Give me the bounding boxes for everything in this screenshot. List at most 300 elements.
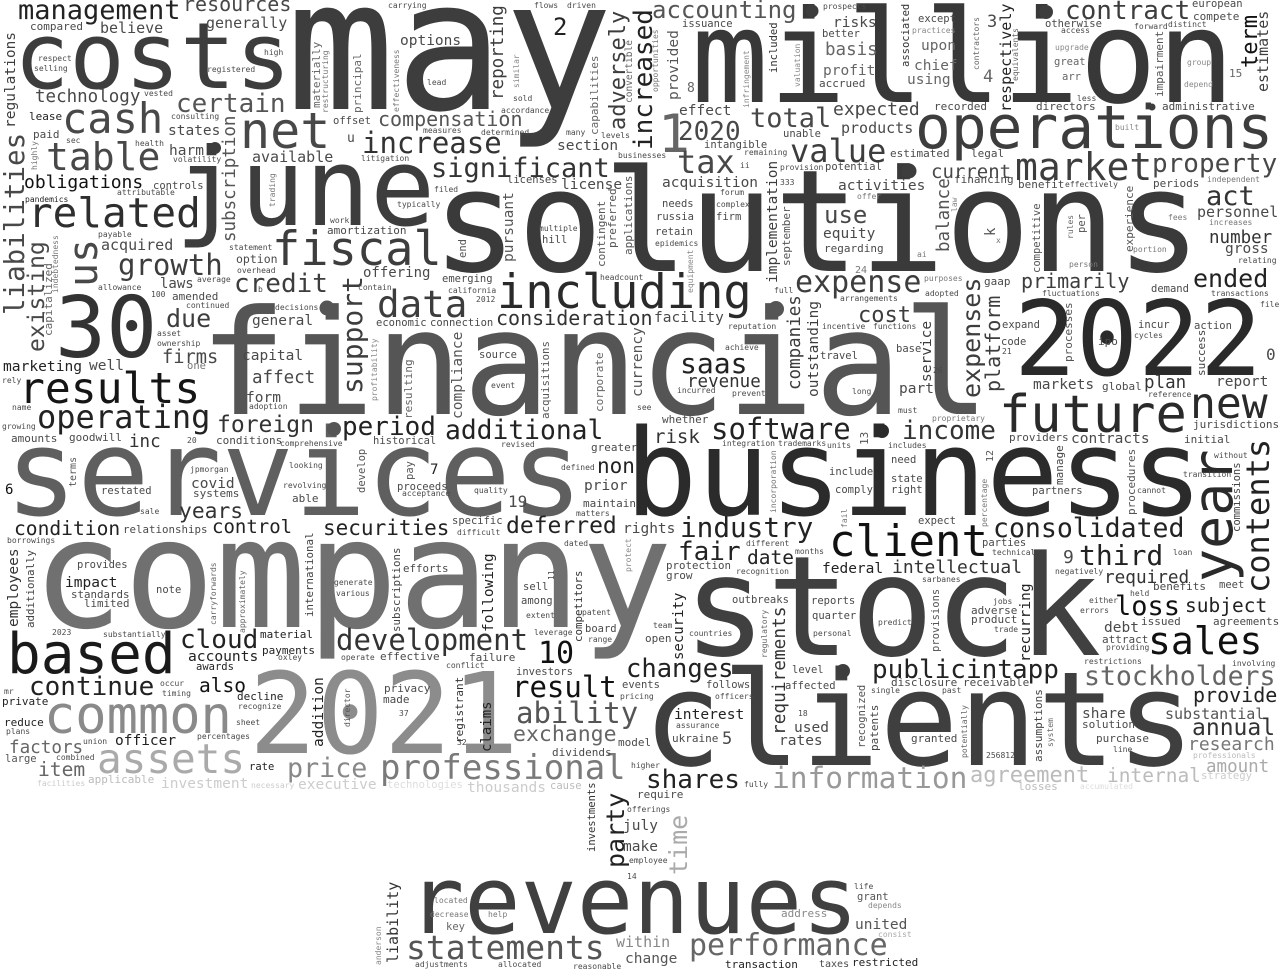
medium words: performance	[689, 928, 888, 963]
horizontal small words: must	[898, 406, 917, 415]
medium words: app	[1012, 655, 1059, 685]
word: 30: 30	[55, 279, 157, 378]
horizontal small words: 32	[457, 738, 467, 747]
horizontal small words: mr	[4, 687, 14, 696]
horizontal small words: officers	[715, 692, 754, 701]
horizontal small words: consist	[878, 930, 912, 939]
vertical small words: capabilities	[588, 56, 601, 135]
horizontal small words: allowance	[98, 283, 142, 292]
vertical words: employees	[6, 548, 22, 627]
horizontal small words: combined	[56, 753, 95, 762]
medium words: firms	[162, 347, 218, 368]
medium words: price	[287, 753, 367, 784]
vertical words: companies	[785, 295, 805, 390]
medium words: required	[1104, 568, 1189, 588]
medium words: item	[38, 758, 85, 781]
horizontal small words: able	[292, 492, 318, 505]
horizontal small words: difficult	[457, 528, 501, 537]
medium words: compensation	[378, 107, 522, 131]
horizontal small words: issuance	[682, 18, 733, 30]
vertical small words: competitive	[1031, 203, 1043, 273]
medium words: current	[931, 161, 1011, 183]
horizontal small words: countries	[689, 629, 733, 638]
horizontal small words: file	[1260, 300, 1279, 309]
horizontal small words: licenses	[507, 174, 558, 186]
horizontal small words: past	[942, 686, 961, 695]
horizontal small words: regarding	[824, 242, 884, 255]
horizontal small words: determined	[481, 128, 529, 137]
horizontal small words: meet	[1219, 579, 1244, 591]
horizontal small words: specific	[452, 515, 503, 527]
horizontal small words: work	[330, 216, 349, 225]
horizontal small words: require	[637, 788, 683, 801]
vertical small words: competitors	[572, 570, 585, 642]
medium words: total	[750, 103, 831, 134]
horizontal small words: percentages	[197, 732, 250, 741]
medium words: loss	[1115, 591, 1180, 622]
horizontal small words: sheet	[236, 718, 260, 727]
vertical small words: processes	[1062, 302, 1075, 362]
horizontal small words: whether	[662, 413, 709, 426]
horizontal small words: goodwill	[69, 431, 122, 444]
vertical words: regulations	[3, 32, 19, 128]
horizontal small words: generate	[334, 578, 373, 587]
horizontal small words: sold	[513, 94, 532, 103]
medium words: data	[377, 282, 467, 326]
vertical words: following	[481, 553, 497, 632]
horizontal small words: ukraine	[672, 732, 718, 745]
horizontal small words: impact	[65, 575, 117, 591]
horizontal small words: 20	[187, 436, 197, 445]
horizontal small words: material	[260, 628, 313, 641]
medium words: growth	[118, 248, 223, 282]
medium words: public	[872, 655, 966, 685]
horizontal small words: board	[585, 623, 617, 635]
horizontal small words: maintain	[583, 497, 636, 510]
horizontal small words: achieve	[725, 343, 759, 352]
vertical small words: percentage	[980, 479, 989, 527]
medium words: 10	[538, 636, 574, 671]
horizontal small words: emerging	[442, 273, 493, 285]
medium words: agreement	[970, 763, 1089, 788]
horizontal small words: prospects	[823, 2, 867, 11]
word: stock: stock	[683, 526, 1101, 688]
vertical words: contents	[1239, 439, 1277, 593]
horizontal small words: 2012	[476, 295, 495, 304]
vertical words: existing	[24, 241, 50, 352]
medium words: certain	[176, 89, 286, 119]
medium words: value	[790, 132, 886, 170]
horizontal small words: among	[521, 595, 553, 607]
horizontal small words: periods	[1153, 177, 1199, 190]
horizontal small words: private	[2, 695, 48, 708]
vertical words: subscription	[220, 116, 240, 242]
horizontal small words: executive	[298, 777, 377, 793]
vertical small words: approximately	[238, 570, 247, 633]
horizontal small words: form	[246, 390, 281, 406]
horizontal small words: address	[781, 907, 827, 920]
horizontal small words: controls	[153, 180, 204, 192]
horizontal small words: increases	[1209, 218, 1253, 227]
horizontal small words: using	[907, 72, 951, 88]
horizontal small words: matters	[576, 509, 610, 518]
vertical small words: investments	[586, 782, 598, 852]
vertical words: compliance	[450, 332, 466, 419]
horizontal small words: affected	[785, 680, 836, 692]
vertical words: respectively	[997, 4, 1015, 112]
medium words: ability	[516, 696, 638, 730]
horizontal small words: different	[746, 539, 790, 548]
horizontal small words: technical	[992, 548, 1036, 557]
horizontal small words: grow	[666, 569, 693, 582]
horizontal small words: reduce	[4, 716, 44, 729]
vertical small words: carryforwards	[209, 562, 218, 625]
horizontal small words: high	[264, 48, 283, 57]
horizontal small words: headcount	[600, 273, 644, 282]
horizontal small words: offset	[333, 115, 371, 127]
horizontal small words: source	[479, 349, 517, 361]
vertical small words: additionally	[24, 549, 37, 628]
vertical words: implementation	[765, 161, 781, 283]
word: 2021: 2021	[249, 650, 519, 780]
medium words: market	[1015, 145, 1152, 189]
horizontal small words: decisions	[275, 303, 319, 312]
vertical small words: experience	[1123, 186, 1136, 252]
horizontal small words: portion	[1133, 245, 1167, 254]
horizontal small words: built	[1115, 123, 1139, 132]
vertical small words: associated	[900, 4, 912, 67]
horizontal small words: various	[336, 589, 370, 598]
horizontal small words: ownership	[157, 339, 201, 348]
horizontal small words: chief	[914, 58, 958, 74]
horizontal small words: without	[1214, 451, 1248, 460]
vertical small words: corporate	[593, 352, 606, 412]
vertical words: security	[671, 593, 687, 660]
horizontal small words: full	[774, 286, 793, 295]
medium words: fiscal	[272, 222, 442, 277]
vertical words: recurring	[1018, 583, 1034, 662]
medium words: related	[28, 189, 201, 237]
horizontal small words: travel	[820, 350, 858, 362]
horizontal small words: transaction	[725, 958, 798, 971]
vertical words: service	[919, 321, 935, 382]
vertical small words: materially	[310, 41, 323, 108]
horizontal small words: share	[1082, 706, 1126, 722]
horizontal small words: long	[852, 387, 871, 396]
horizontal small words: include	[829, 466, 873, 478]
vertical small words: success	[1195, 330, 1208, 376]
horizontal small words: protection	[666, 559, 731, 572]
horizontal small words: person	[1069, 260, 1098, 269]
medium words: assets	[97, 735, 245, 783]
horizontal small words: fully	[744, 780, 768, 789]
medium words: non	[597, 454, 635, 478]
horizontal small words: rely	[2, 376, 21, 385]
medium words: sales	[1148, 619, 1262, 663]
horizontal small words: sale	[140, 507, 159, 516]
horizontal small words: legal	[971, 147, 1004, 160]
horizontal small words: proprietary	[932, 414, 985, 423]
vertical small words: trading	[268, 173, 277, 207]
word: solutions: solutions	[432, 140, 1201, 305]
medium words: period	[342, 412, 436, 442]
vertical small words: patents	[868, 705, 881, 751]
medium words: increase	[362, 126, 502, 160]
horizontal small words: decline	[237, 690, 283, 703]
word: financial: financial	[199, 279, 990, 449]
horizontal small words: overhead	[237, 266, 276, 275]
horizontal small words: timing	[162, 689, 191, 698]
horizontal small words: activities	[838, 178, 925, 194]
medium words: due	[166, 304, 211, 333]
horizontal small words: great	[1054, 56, 1086, 68]
medium words: 1	[658, 104, 690, 165]
medium words: research	[1188, 734, 1275, 755]
word: june: june	[175, 126, 435, 251]
word: common: common	[44, 686, 232, 746]
bullet glyphs	[209, 4, 1156, 678]
horizontal small words: california	[448, 286, 496, 295]
vertical small words: september	[780, 206, 793, 266]
medium words: obligations	[24, 172, 143, 193]
vertical small words: manage	[1053, 445, 1066, 485]
horizontal small words: part	[899, 381, 934, 397]
horizontal small words: 8	[687, 81, 695, 96]
vertical small words: applications	[622, 176, 635, 255]
horizontal small words: investors	[516, 666, 573, 678]
horizontal small words: range	[588, 635, 612, 644]
horizontal small words: retain	[655, 226, 693, 238]
horizontal small words: firm	[716, 211, 741, 223]
horizontal small words: payable	[98, 230, 132, 239]
vertical small words: end	[457, 239, 469, 258]
horizontal small words: purchase	[1096, 732, 1149, 745]
horizontal small words: selling	[34, 64, 68, 73]
horizontal small words: standards	[71, 588, 130, 601]
vertical small words: restructuring	[321, 50, 330, 113]
horizontal small words: personal	[813, 629, 852, 638]
horizontal small words: allocated	[498, 960, 542, 969]
horizontal small words: events	[622, 679, 660, 691]
vertical small words: profitability	[370, 338, 379, 401]
horizontal small words: strategy	[1201, 770, 1252, 782]
medium words: risk	[654, 426, 700, 448]
word: 2022: 2022	[1014, 280, 1262, 400]
vertical words: increased	[629, 9, 659, 150]
vertical small words: director	[343, 688, 352, 727]
medium words: industry	[680, 511, 813, 544]
medium words: development	[336, 623, 528, 657]
medium words: int	[966, 655, 1013, 685]
horizontal small words: officer	[115, 733, 176, 749]
horizontal small words: 4	[983, 67, 993, 87]
vertical small words: similar	[512, 54, 521, 88]
horizontal small words: necessary	[251, 781, 295, 790]
horizontal small words: 333	[780, 178, 795, 187]
medium words: table	[46, 135, 160, 179]
vertical words: currency	[630, 327, 646, 397]
medium words: expense	[795, 265, 921, 300]
horizontal small words: pricing	[620, 692, 654, 701]
vertical words: reporting	[488, 5, 508, 100]
horizontal small words: rate	[249, 761, 274, 773]
horizontal small words: u	[347, 131, 355, 146]
horizontal small words: accumulated	[1080, 782, 1133, 791]
horizontal small words: team	[653, 621, 672, 630]
horizontal small words: depends	[868, 901, 902, 910]
horizontal small words: cannot	[1137, 486, 1166, 495]
horizontal small words: 0	[1266, 345, 1276, 364]
horizontal small words: economic	[376, 317, 427, 329]
horizontal small words: b	[258, 285, 263, 294]
horizontal small words: efforts	[403, 562, 449, 575]
medium words: consolidated	[993, 513, 1184, 544]
horizontal small words: payments	[262, 644, 315, 657]
medium words: condition	[14, 517, 120, 540]
medium words: control	[212, 516, 292, 538]
horizontal small words: 100	[151, 290, 166, 299]
vertical small words: anderson	[374, 926, 383, 965]
horizontal small words: multiple	[539, 224, 578, 233]
vertical words: us	[61, 239, 107, 287]
horizontal small words: historical	[373, 435, 436, 447]
horizontal small words: markets	[1033, 377, 1094, 393]
horizontal small words: marketing	[3, 358, 82, 375]
horizontal small words: life	[854, 882, 873, 891]
horizontal small words: flows	[534, 1, 558, 10]
horizontal small words: adopted	[925, 289, 959, 298]
medium words: fair	[678, 537, 741, 567]
horizontal small words: restrictions	[1084, 657, 1142, 666]
vertical small words: recognized	[856, 685, 868, 748]
horizontal small words: jurisdictions	[1193, 418, 1279, 431]
horizontal small words: event	[491, 381, 515, 390]
horizontal small words: many	[566, 128, 585, 137]
horizontal small words: epidemics	[655, 239, 699, 248]
horizontal small words: amended	[172, 290, 218, 303]
horizontal small words: occur	[160, 679, 184, 688]
horizontal small words: debt	[1104, 620, 1139, 636]
horizontal small words: except	[918, 13, 956, 25]
medium words: significant	[431, 153, 610, 184]
horizontal small words: 15	[1229, 67, 1242, 80]
horizontal small words: products	[841, 119, 913, 137]
horizontal small words: personnel	[1197, 203, 1278, 221]
horizontal small words: adjustments	[415, 960, 468, 969]
horizontal small words: transition	[1183, 470, 1231, 479]
horizontal small words: level	[792, 664, 824, 676]
vertical small words: fail	[840, 509, 849, 528]
horizontal small words: operate	[341, 653, 375, 662]
horizontal small words: complex	[716, 200, 750, 209]
medium words: new	[1190, 379, 1268, 429]
horizontal small words: profit	[823, 63, 875, 79]
vertical small words: resulting	[402, 359, 415, 419]
horizontal small words: effectively	[1065, 180, 1118, 189]
horizontal small words: comply	[835, 484, 873, 496]
word: based: based	[7, 622, 176, 687]
horizontal small words: offering	[363, 265, 430, 281]
medium words: income	[902, 416, 996, 446]
horizontal small words: disclosure	[891, 676, 957, 689]
horizontal small words: reputation	[728, 322, 776, 331]
horizontal small words: expand	[1002, 319, 1040, 331]
horizontal small words: upon	[921, 38, 956, 54]
vertical words: support	[336, 276, 369, 394]
horizontal small words: gaap	[984, 275, 1010, 288]
horizontal small words: access	[1061, 26, 1090, 35]
vertical small words: assumptions	[1032, 689, 1045, 762]
horizontal small words: 2023	[52, 628, 71, 637]
horizontal small words: forward	[1134, 22, 1168, 31]
horizontal small words: harm	[169, 143, 204, 159]
horizontal small words: partners	[1032, 485, 1083, 497]
horizontal small words: federal	[822, 561, 883, 577]
horizontal small words: comprehensive	[280, 439, 343, 448]
horizontal small words: rates	[779, 733, 823, 749]
horizontal small words: 256812	[986, 751, 1015, 760]
horizontal small words: negatively	[1055, 567, 1103, 576]
word: clients: clients	[643, 643, 1195, 796]
horizontal small words: units	[827, 441, 851, 450]
medium words: internal	[1107, 764, 1201, 787]
horizontal small words: jobs	[993, 597, 1012, 606]
vertical small words: subscriptions	[390, 547, 403, 632]
horizontal small words: arrangements	[840, 294, 898, 303]
horizontal small words: relating	[1238, 256, 1277, 265]
vertical small words: terms	[68, 457, 79, 487]
horizontal small words: integration	[722, 439, 775, 448]
horizontal small words: accounts	[188, 648, 258, 665]
horizontal small words: includes	[888, 441, 927, 450]
horizontal small words: registered	[207, 65, 255, 74]
vertical words: time	[664, 815, 693, 875]
horizontal small words: capital	[242, 348, 303, 364]
horizontal small words: name	[12, 403, 31, 412]
horizontal small words: code	[1001, 336, 1026, 348]
horizontal small words: right	[891, 484, 923, 496]
vertical small words: indebtedness	[51, 235, 60, 293]
horizontal small words: believe	[100, 19, 163, 37]
horizontal small words: amounts	[11, 432, 57, 445]
horizontal small words: product	[971, 613, 1017, 626]
horizontal small words: taxes	[819, 959, 849, 970]
horizontal small words: recognition	[736, 567, 789, 576]
horizontal small words: conflict	[446, 661, 485, 670]
horizontal small words: laws	[160, 276, 194, 292]
horizontal small words: reference	[1148, 390, 1192, 399]
horizontal small words: extent	[526, 611, 555, 620]
horizontal small words: provides	[77, 559, 128, 571]
medium words: technology	[35, 87, 140, 107]
medium words: years	[179, 499, 243, 524]
horizontal small words: months	[795, 547, 824, 556]
medium words: inc	[129, 432, 161, 452]
horizontal small words: litigation	[361, 154, 409, 163]
vertical small words: per	[1076, 214, 1088, 233]
horizontal small words: restricted	[852, 956, 918, 969]
horizontal small words: accrued	[819, 77, 865, 90]
horizontal small words: revised	[501, 440, 535, 449]
vertical small words: k	[983, 227, 999, 236]
horizontal small words: paid	[33, 128, 60, 141]
vertical small words: pay	[404, 461, 416, 480]
vertical small words: principal	[351, 53, 364, 113]
horizontal small words: line	[1113, 745, 1132, 754]
horizontal small words: ii	[740, 161, 750, 170]
horizontal small words: transactions	[1211, 289, 1269, 298]
horizontal small words: intangible	[704, 139, 767, 151]
